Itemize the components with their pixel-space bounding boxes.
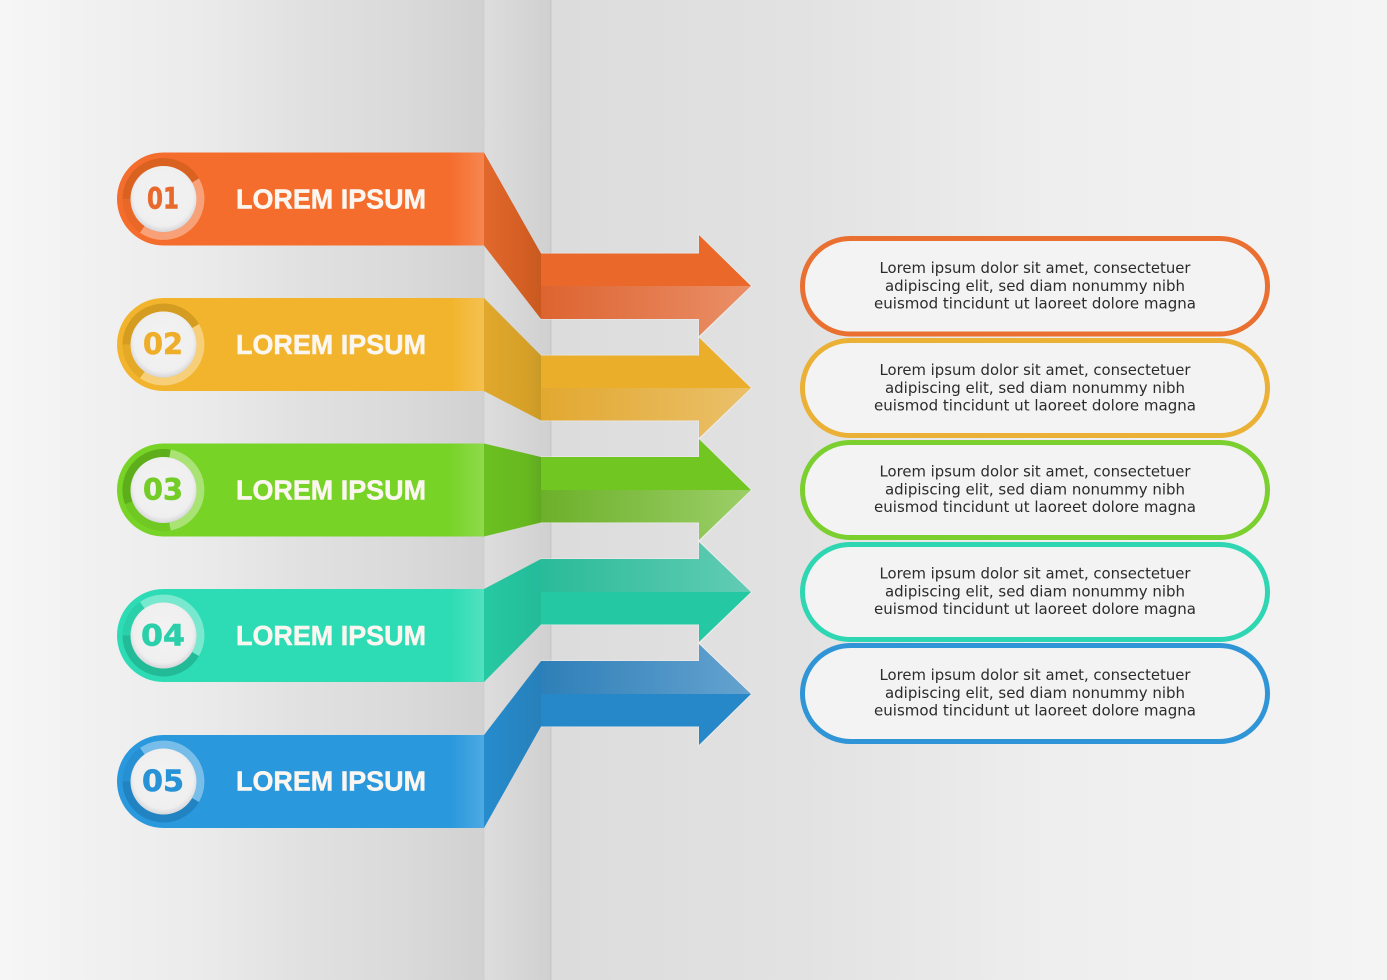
text pill 4: teal: adipiscing elit, sed diam nonummy nibh (885, 582, 1185, 600)
banner shape (117, 152, 484, 246)
banner 1: orange (117, 152, 484, 246)
banner shape (117, 444, 484, 536)
text pill 2: yellow: adipiscing elit, sed diam nonummy nibh (885, 379, 1185, 397)
text pill 1: orange: Lorem ipsum dolor sit amet, consectetuer (880, 259, 1191, 277)
banner shape (117, 298, 484, 391)
text pill 5: blue: adipiscing elit, sed diam nonummy nibh (885, 684, 1185, 702)
text pill 3: green (802, 442, 1268, 538)
number badge (126, 453, 200, 527)
banner heading: LOREM IPSUM (236, 766, 426, 796)
text pill 2: yellow: euismod tincidunt ut laoreet dolore magna (874, 396, 1196, 414)
arrow 1: orange (484, 152, 751, 337)
banner 5: blue (117, 735, 484, 828)
number badge: 05 (142, 764, 184, 798)
number badge: 03 (143, 472, 183, 506)
arrow 5: blue (484, 643, 751, 828)
banner heading: LOREM IPSUM (236, 474, 426, 506)
number badge (126, 162, 200, 236)
banner heading: LOREM IPSUM (236, 620, 426, 651)
arrow 4: teal (484, 541, 751, 682)
banner heading: LOREM IPSUM (236, 184, 426, 214)
number badge: 02 (143, 327, 183, 361)
text pill 1: orange: adipiscing elit, sed diam nonummy nibh (885, 277, 1185, 295)
text pill 2: yellow (802, 340, 1268, 436)
banner 4: teal (117, 589, 484, 682)
arrow 3: green (484, 439, 751, 541)
text pill 3: green: euismod tincidunt ut laoreet dolore magna (874, 498, 1196, 516)
number badge (126, 745, 200, 818)
banner 3: green (117, 444, 484, 536)
number badge: 04 (141, 618, 185, 652)
number badge (126, 599, 200, 672)
arrow 2: yellow (484, 298, 751, 439)
text pill 2: yellow: Lorem ipsum dolor sit amet, consectetuer (880, 361, 1191, 379)
banner heading: LOREM IPSUM (236, 329, 426, 360)
banner shape (117, 589, 484, 682)
banner shape (117, 735, 484, 828)
text pill 4: teal: euismod tincidunt ut laoreet dolore magna (874, 600, 1196, 618)
number badge: 01 (147, 182, 179, 216)
text pill 4: teal: Lorem ipsum dolor sit amet, consectetuer (880, 564, 1191, 582)
banner 2: yellow (117, 298, 484, 391)
text pill 1: orange (802, 238, 1268, 334)
text pill 1: orange: euismod tincidunt ut laoreet dolore magna (874, 294, 1196, 312)
text pill 5: blue (802, 646, 1268, 742)
number badge (126, 308, 200, 381)
text pill 3: green: adipiscing elit, sed diam nonummy nibh (885, 480, 1185, 498)
text pill 3: green: Lorem ipsum dolor sit amet, consectetuer (880, 462, 1191, 480)
text pill 4: teal (802, 544, 1268, 640)
text pill 5: blue: euismod tincidunt ut laoreet dolore magna (874, 702, 1196, 720)
text pill 5: blue: Lorem ipsum dolor sit amet, consectetuer (880, 666, 1191, 684)
